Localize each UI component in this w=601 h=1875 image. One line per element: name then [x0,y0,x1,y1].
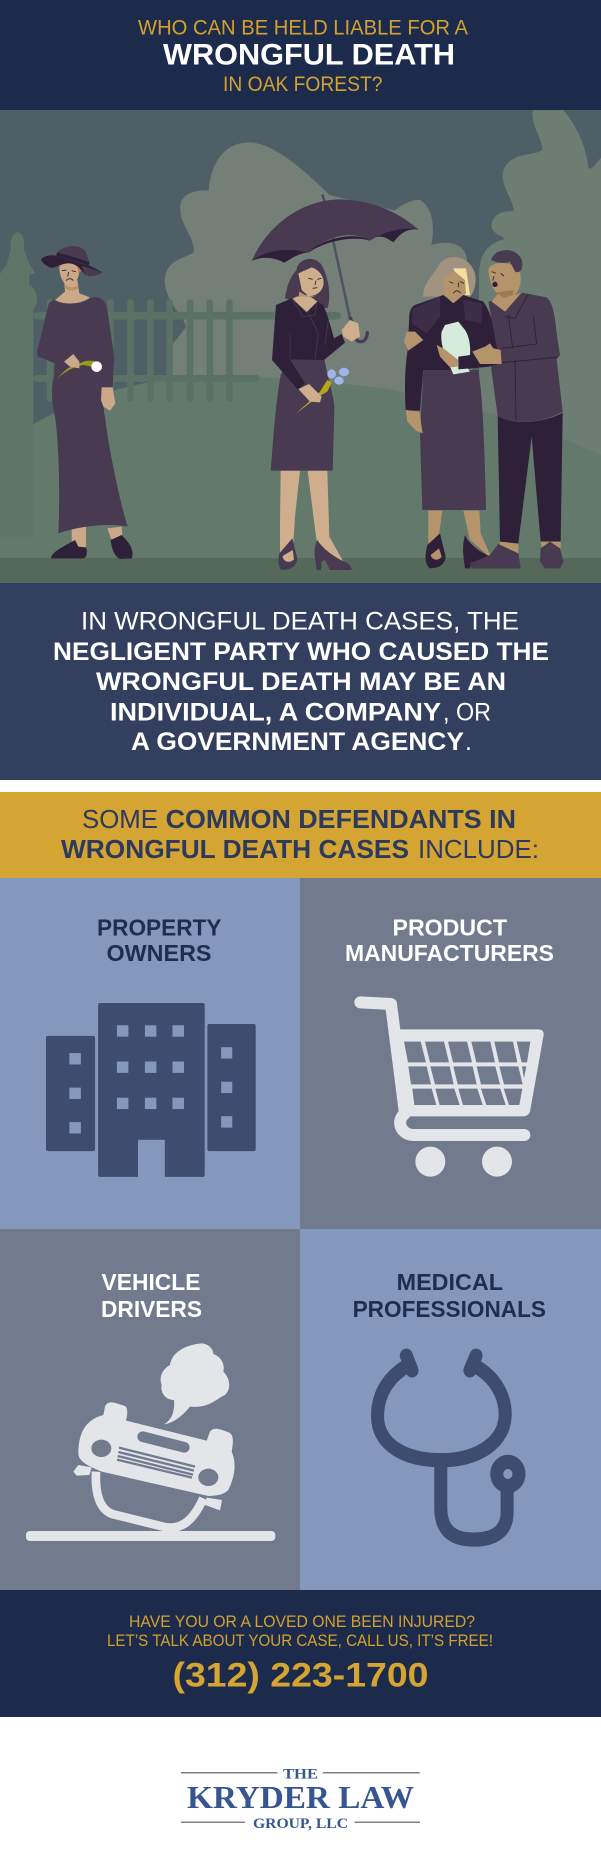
title line 2: WRONGFUL DEATH [163,38,455,71]
ground [0,558,601,583]
icon: shopping cart [360,1002,544,1177]
logo: The Kryder Law Group, LLC: KRYDER LAW [187,1779,414,1815]
statement line 3: WRONGFUL DEATH MAY BE AN [96,668,506,696]
figure: woman with umbrella and blue flowers [252,195,418,570]
fence [33,299,341,402]
icon: office buildings [46,1003,256,1178]
label: product manufacturers: MANUFACTURERS [345,940,554,966]
hill [0,376,601,586]
umbrella canopy [252,199,418,263]
statement panel [0,583,601,780]
statement line 1: IN WRONGFUL DEATH CASES, THE [81,608,519,636]
panel: product manufacturers [300,878,601,1229]
icon: stethoscope [378,1356,526,1540]
logo: The Kryder Law Group, LLC [181,1766,420,1832]
statement line 5: . [465,728,472,756]
heading line 2: WRONGFUL DEATH CASES [61,834,409,864]
urn [441,322,470,374]
statement line 2: NEGLIGENT PARTY WHO CAUSED THE [53,638,549,666]
statement line 4: INDIVIDUAL, A COMPANY [110,699,441,727]
label: property owners: PROPERTY [97,915,222,941]
icon: overturned car with smoke [26,1343,275,1541]
logo: The Kryder Law Group, LLC: THE [283,1766,318,1782]
statement line 4: , OR [443,699,491,727]
heading line 1: SOME [82,804,158,834]
header banner [0,0,601,110]
heading line 1: COMMON DEFENDANTS IN [166,804,516,834]
label: product manufacturers [345,915,554,966]
title line 1: WHO CAN BE HELD LIABLE FOR A [138,15,469,39]
gate post [0,232,37,537]
figure: older woman holding urn, comforted by man [404,250,563,568]
figure: woman in hat with white flower [37,246,133,559]
label: vehicle drivers: DRIVERS [101,1296,202,1322]
gold heading band [0,792,601,878]
call to action banner [0,1590,601,1717]
cta line 2: LET’S TALK ABOUT YOUR CASE, CALL US, IT’S FREE! [107,1632,493,1650]
label: medical professionals: PROFESSIONALS [353,1296,546,1322]
title line 3: IN OAK FOREST? [223,72,383,96]
label: vehicle drivers [101,1269,202,1322]
heading line 2: INCLUDE: [418,834,539,864]
background trees [165,110,601,498]
cta line 1: HAVE YOU OR A LOVED ONE BEEN INJURED? [129,1613,475,1631]
logo: The Kryder Law Group, LLC: GROUP, LLC [253,1816,348,1832]
label: medical professionals: MEDICAL [397,1269,503,1295]
panel: property owners [0,878,300,1229]
label: property owners: OWNERS [106,940,212,966]
statement line 5: A GOVERNMENT AGENCY [131,728,464,756]
panel: vehicle drivers [0,1229,300,1590]
label: vehicle drivers: VEHICLE [102,1269,200,1295]
label: medical professionals [353,1269,546,1322]
sky [0,110,601,583]
illustration: mourners at a cemetery [0,110,601,586]
phone number: (312) 223-1700 [172,1657,428,1695]
panel: medical professionals [300,1229,601,1590]
label: product manufacturers: PRODUCT [392,915,507,941]
label: property owners [97,915,222,966]
